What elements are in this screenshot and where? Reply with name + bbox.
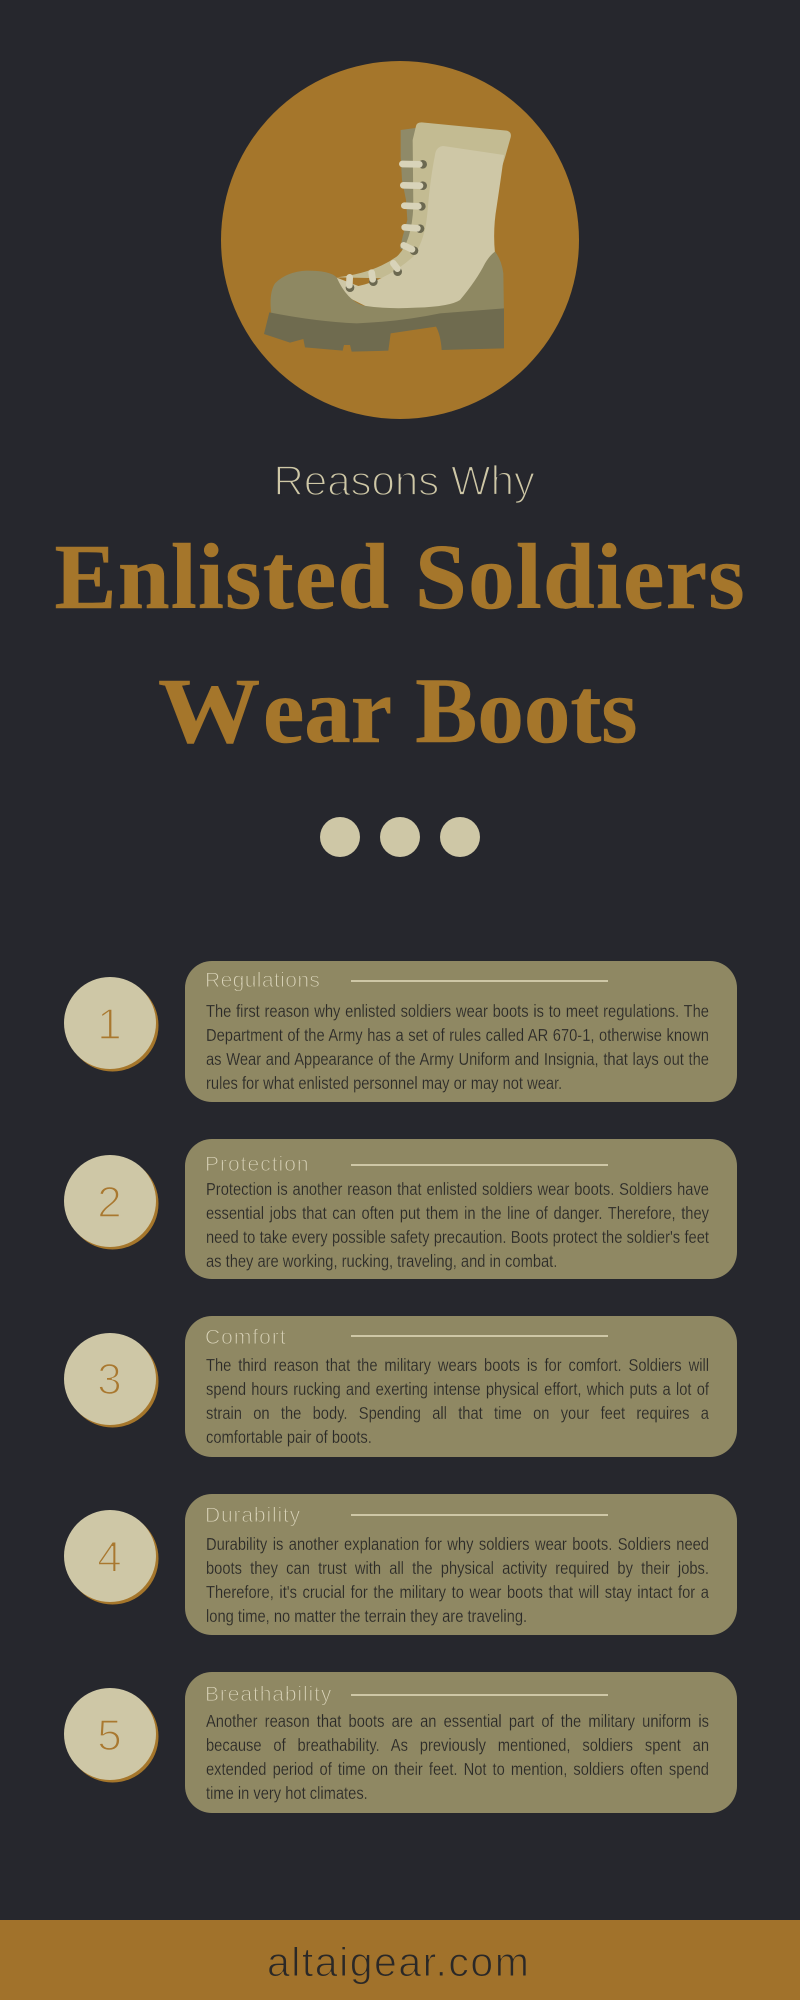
text: Durability: Therefore, it's crucial for the military to wear boots that will stay intact for a <box>206 1582 709 1602</box>
heading: Comfort: Comfort <box>205 1326 287 1349</box>
text: Durability: Durability is another explanation for why soldiers wear boots. Soldiers need <box>206 1534 709 1554</box>
text: Regulations: as Wear and Appearance of the Army Uniform and Insignia, that lays out the <box>206 1048 709 1068</box>
number badge 1 <box>64 977 156 1069</box>
number badge 3 <box>64 1332 156 1424</box>
number badge 4 <box>64 1510 156 1602</box>
text: Durability: boots they can trust with all the physical activity required by their jobs. <box>206 1558 709 1578</box>
panel: Breathability <box>185 1672 737 1812</box>
title line 2: ear Boots <box>263 660 638 762</box>
heading: Breathability: Breathability <box>205 1683 332 1706</box>
panel: Regulations <box>185 961 737 1102</box>
text: Comfort: comfortable pair of boots. <box>206 1427 372 1447</box>
panel: Durability <box>185 1494 737 1634</box>
text: Breathability: because of breathability. As previously mentioned, soldiers spent an <box>206 1735 709 1755</box>
text: Regulations <box>206 1000 709 1092</box>
icon: military boot <box>264 122 511 352</box>
number badge 4: 4 <box>97 1532 122 1582</box>
heading: Protection: Protection <box>205 1153 310 1176</box>
title line 1: Enlisted Soldiers <box>54 526 746 628</box>
number badge 2: 2 <box>97 1178 122 1226</box>
title line 2: W <box>158 660 260 762</box>
text: Regulations: The first reason why enlisted soldiers wear boots is to meet regulations. The <box>206 1000 709 1020</box>
text: Protection: essential jobs that can often put them in the line of danger. Therefore, they <box>206 1203 709 1223</box>
three dots divider <box>320 817 480 857</box>
text: Durability <box>206 1534 709 1626</box>
text: Protection: need to take every possible safety precaution. Boots protect the soldier's feet <box>206 1227 709 1247</box>
text: Breathability <box>206 1711 709 1803</box>
panel: Comfort <box>185 1316 737 1456</box>
number badge 3: 3 <box>97 1355 122 1404</box>
heading: Durability: Durability <box>205 1504 301 1527</box>
text: Protection: as they are working, rucking, traveling, and in combat. <box>206 1251 557 1271</box>
text: Comfort <box>206 1355 709 1447</box>
text: Comfort: The third reason that the military wears boots is for comfort. Soldiers will <box>206 1355 709 1375</box>
text: Protection <box>206 1179 709 1271</box>
hero circle with boot icon <box>221 61 579 419</box>
text: Comfort: strain on the body. Spending all that time on your feet requires a <box>206 1403 709 1423</box>
text: Protection: Protection is another reason that enlisted soldiers wear boots. Soldiers have <box>206 1179 709 1199</box>
footer band <box>0 1920 800 2000</box>
text: Breathability: time in very hot climates. <box>206 1783 368 1803</box>
text: Breathability: Another reason that boots are an essential part of the military uniform is <box>206 1711 709 1731</box>
panel: Protection <box>185 1138 737 1279</box>
footer website text: altaigear.com <box>267 1938 530 1984</box>
text: Regulations: rules for what enlisted personnel may or may not wear. <box>206 1072 562 1092</box>
text: Comfort: spend hours rucking and exerting intense physical effort, which puts a lot of <box>206 1379 709 1399</box>
number badge 2 <box>64 1155 156 1247</box>
number badge 1: 1 <box>97 1000 122 1048</box>
number badge 5 <box>64 1688 156 1780</box>
number badge 5: 5 <box>97 1710 122 1760</box>
text: Durability: long time, no matter the terrain they are traveling. <box>206 1606 527 1626</box>
text: Breathability: extended period of time on their feet. Not to mention, soldiers often spend <box>206 1759 709 1779</box>
heading: Regulations: Regulations <box>205 969 320 992</box>
subtitle: Reasons Why: Reasons Why <box>274 457 535 504</box>
text: Regulations: Department of the Army has a set of rules called AR 670-1, otherwise known <box>206 1024 709 1044</box>
